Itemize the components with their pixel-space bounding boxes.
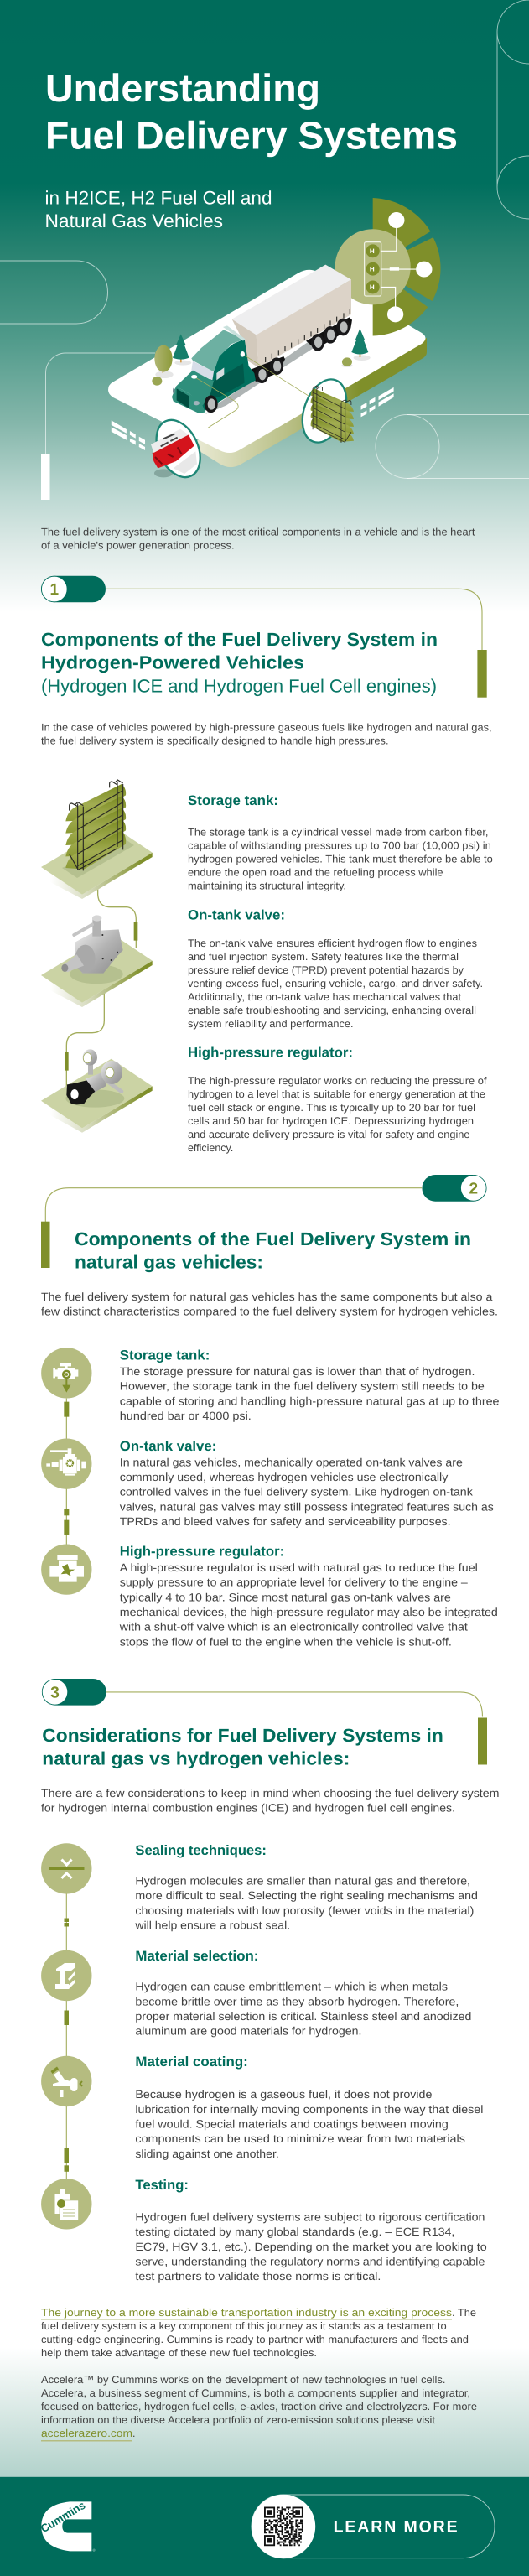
section 3 heading: natural gas vs hydrogen vehicles:: [42, 1748, 350, 1769]
intro text: [41, 526, 475, 551]
material selection text: aluminum are good materials for hydrogen.: [135, 2025, 361, 2038]
natural gas storage tank text: capable of storing and handling high-pressure natural gas at up to three: [120, 1394, 500, 1407]
testing text: EC79, HGV 3.1, etc.). Depending on the market you are looking to: [135, 2241, 487, 2253]
material selection text: become brittle over time as they absorb hydrogen. Therefore,: [135, 1995, 459, 2007]
natural gas regulator text: supply pressure to an appropriate level for delivery to the engine –: [120, 1576, 468, 1589]
icon: sealing: [41, 1843, 92, 1894]
storage tank text: Storage tank:: [188, 793, 278, 808]
natural gas regulator text: with a shut-off valve which is an electronically controlled valve that: [119, 1621, 468, 1633]
natural gas on-tank valve text: commonly used, whereas hydrogen vehicles use electronically: [120, 1471, 449, 1483]
testing text: Testing:: [135, 2178, 189, 2193]
natural gas storage tank text: [120, 1348, 500, 1422]
subtitle: in H2ICE, H2 Fuel Cell and: [45, 187, 272, 208]
natural gas on-tank valve text: controlled valves in the fuel delivery system. Like hydrogen on-tank: [120, 1486, 473, 1498]
material coating text: [135, 2054, 483, 2160]
testing text: test partners to validate those norms is critical.: [135, 2270, 381, 2283]
natural gas storage tank text: Storage tank:: [120, 1348, 210, 1363]
section 2 heading: Components of the Fuel Delivery System in: [75, 1228, 471, 1249]
natural gas regulator text: A high-pressure regulator is used with natural gas to reduce the fuel: [120, 1561, 478, 1574]
subtitle: [45, 187, 272, 231]
title: Fuel Delivery Systems: [45, 113, 458, 157]
illustration: on-tank valve on plate: [41, 915, 153, 1007]
on-tank valve text: venting excess fuel, ensuring vehicle, cargo, and driver safety.: [188, 978, 483, 989]
on-tank valve text: pressure relief device (TPRD) prevent potential hazards by: [188, 964, 464, 976]
icon: coating spray gun: [41, 2056, 92, 2106]
platform: isometric base: [108, 270, 427, 467]
material selection text: proper material selection is critical. Stainless steel and anodized: [135, 2010, 471, 2023]
testing text: Hydrogen fuel delivery systems are subject to rigorous certification: [135, 2210, 485, 2224]
high-pressure regulator text: The high-pressure regulator works on reducing the pressure of: [188, 1075, 487, 1087]
engine callout: [148, 413, 209, 484]
high-pressure regulator text: hydrogen to a level that is suitable for energy generation at the: [188, 1088, 485, 1100]
natural gas storage tank text: The storage pressure for natural gas is lower than that of hydrogen.: [120, 1365, 475, 1378]
on-tank valve text: On-tank valve:: [188, 908, 285, 923]
learn more button: LEARN MORE: [334, 2517, 458, 2536]
sealing techniques text: Sealing techniques:: [135, 1843, 267, 1858]
material coating text: fuel would. Special materials and coatings between moving: [135, 2118, 449, 2131]
material coating text: lubrication for internally moving components in the way that diesel: [135, 2103, 483, 2116]
Cummins logo: [39, 2499, 96, 2553]
tank callout: [294, 373, 355, 449]
data gauge with H2 nodes: [335, 198, 441, 336]
Accelera paragraph: .: [132, 2428, 135, 2439]
natural gas regulator text: stops the flow of fuel to the engine when the vehicle is shut-off.: [120, 1635, 452, 1648]
on-tank valve text: Additionally, the on-tank valve has mechanical valves that: [188, 991, 462, 1003]
section 1 heading: Hydrogen-Powered Vehicles: [41, 652, 304, 673]
section 3 icon column: [41, 1843, 92, 2229]
section 1 heading: (Hydrogen ICE and Hydrogen Fuel Cell engines): [41, 676, 437, 697]
section 2 heading: natural gas vehicles:: [75, 1252, 263, 1273]
high-pressure regulator text: and accurate delivery pressure is vital for safety and engine: [188, 1129, 470, 1140]
section 2 heading: [75, 1228, 471, 1273]
Accelera paragraph: accelerazero.com: [41, 2428, 132, 2439]
Cummins logo: ®: [93, 2548, 96, 2553]
tractor cab: [172, 325, 256, 413]
on-tank valve text: enable safe troubleshooting and servicing, enhancing overall: [188, 1005, 476, 1016]
Accelera paragraph: Accelera, a business segment of Cummins, is both a components supplier and integrator,: [41, 2387, 470, 2399]
natural gas on-tank valve text: On-tank valve:: [120, 1439, 216, 1454]
material coating text: Because hydrogen is a gaseous fuel, it does not provide: [135, 2088, 432, 2101]
hero decorative outlines: [0, 0, 529, 478]
storage tank text: capable of withstanding pressures up to 700 bar (10,000 psi) in: [188, 840, 491, 852]
section 3 badge and connector: [42, 1679, 487, 1764]
section 1 intro: In the case of vehicles powered by high-pressure gaseous fuels like hydrogen and natural gas,: [41, 722, 492, 734]
wheels and chassis: [205, 317, 352, 413]
section 1 heading: Components of the Fuel Delivery System in: [41, 629, 438, 650]
storage tank text: [188, 793, 493, 892]
Accelera paragraph: Accelera™ by Cummins works on the development of new technologies in fuel cells.: [41, 2374, 446, 2386]
closing paragraph: [41, 2307, 476, 2359]
trailer: [232, 265, 351, 367]
subtitle: Natural Gas Vehicles: [45, 210, 223, 231]
natural gas regulator text: [119, 1545, 498, 1648]
intro text: The fuel delivery system is one of the most critical components in a vehicle and is the heart: [41, 526, 475, 538]
Accelera paragraph: information on the diverse Accelera portfolio of zero-emission solutions please visit: [41, 2414, 436, 2426]
high-pressure regulator text: cells and 50 bar for hydrogen ICE. Depressurizing hydrogen: [188, 1115, 474, 1127]
white rectangle on hero left: [41, 454, 50, 500]
storage tank text: maintaining its structural integrity.: [188, 880, 346, 892]
section 2 intro: The fuel delivery system for natural gas vehicles has the same components but also a: [41, 1291, 493, 1303]
natural gas storage tank text: However, the storage tank in the fuel delivery system still needs to be: [120, 1380, 485, 1393]
Accelera paragraph: focused on batteries, hydrogen fuel cells, e-axles, traction drive and electrolyzers. For more: [41, 2401, 477, 2412]
sealing techniques text: Hydrogen molecules are smaller than natural gas and therefore,: [135, 1875, 470, 1887]
intro text: of a vehicle's power generation process.: [41, 539, 235, 551]
title: Understanding: [45, 66, 320, 110]
icon: storage tank: [41, 1348, 91, 1398]
sealing techniques text: choosing materials with low porosity (fewer voids in the material): [135, 1904, 474, 1917]
storage tank text: endure the open road and the refueling process while: [188, 867, 443, 879]
section 3 heading: [42, 1725, 443, 1769]
closing paragraph: cutting-edge engineering. Cummins is ready to partner with manufacturers and fleets and: [41, 2334, 469, 2345]
natural gas on-tank valve text: [120, 1439, 494, 1528]
on-tank valve text: system reliability and performance.: [188, 1018, 354, 1030]
icon: testing clipboard: [41, 2179, 92, 2229]
illustration: storage tank on plate: [41, 780, 153, 899]
material selection text: Hydrogen can cause embrittlement – which is when metals: [135, 1981, 448, 1993]
section 3 intro: [41, 1787, 500, 1815]
learn more button: [252, 2495, 495, 2558]
section 3 intro: There are a few considerations to keep in mind when choosing the fuel delivery system: [41, 1787, 500, 1800]
section 3 intro: for hydrogen internal combustion engines (ICE) and hydrogen fuel cell engines.: [41, 1802, 455, 1815]
Cummins logo: Cummins: [39, 2499, 87, 2535]
natural gas regulator text: High-pressure regulator:: [120, 1545, 284, 1560]
section 3 badge and connector: 3: [50, 1684, 60, 1702]
closing paragraph: help them take advantage of these new fuel technologies.: [41, 2347, 317, 2359]
testing text: [135, 2178, 487, 2283]
Accelera paragraph: [41, 2374, 477, 2442]
hero white dash marks: [112, 387, 394, 450]
truck and scenery: [152, 265, 371, 428]
section 2 intro: few distinct characteristics compared to the fuel delivery system for hydrogen vehicles.: [41, 1306, 498, 1318]
data gauge with H2 nodes: H: [370, 266, 375, 273]
on-tank valve text: [188, 908, 483, 1030]
sealing techniques text: will help ensure a robust seal.: [134, 1919, 290, 1932]
section 1 badge and connector: 1: [50, 581, 60, 599]
icon: material I-beam: [41, 1950, 92, 2001]
on-tank valve text: The on-tank valve ensures efficient hydrogen flow to engines: [188, 937, 477, 949]
footer band: [0, 2477, 529, 2576]
storage tank text: hydrogen powered vehicles. This tank must therefore be able to: [188, 854, 493, 865]
testing text: serve, understanding the regulatory norms and identifying capable: [135, 2256, 485, 2267]
section 2 badge and connector: 2: [469, 1181, 478, 1197]
section 1 heading: [41, 629, 438, 697]
high-pressure regulator text: High-pressure regulator:: [188, 1046, 353, 1061]
illustration: high-pressure regulator on plate: [41, 1049, 153, 1133]
data gauge with H2 nodes: H: [370, 283, 375, 291]
material selection text: [135, 1949, 471, 2038]
closing paragraph: The journey to a more sustainable transportation industry is an exciting process: [41, 2307, 452, 2319]
natural gas on-tank valve text: TPRDs and bleed valves for safety and serviceability purposes.: [120, 1515, 451, 1528]
sealing techniques text: [134, 1843, 478, 1932]
storage tank text: The storage tank is a cylindrical vessel made from carbon fiber,: [188, 827, 488, 839]
section 2 badge and connector: [41, 1175, 486, 1268]
high-pressure regulator text: fuel cell stack or engine. This is typically up to 20 bar for fuel: [188, 1102, 475, 1114]
material coating text: sliding against one another.: [135, 2148, 279, 2160]
section 2 intro: [41, 1291, 498, 1318]
material coating text: Material coating:: [135, 2054, 248, 2070]
high-pressure regulator text: efficiency.: [188, 1142, 233, 1154]
icon: regulator: [41, 1544, 91, 1595]
natural gas storage tank text: hundred bar or 4000 psi.: [120, 1410, 252, 1422]
testing text: testing dictated by many global standards (e.g. – ECE R134,: [135, 2225, 454, 2238]
section 1 intro: [41, 722, 492, 747]
natural gas on-tank valve text: valves, natural gas valves may still possess integrated features such as: [120, 1500, 494, 1513]
QR code: [264, 2507, 303, 2546]
section 1 intro: the fuel delivery system is specifically designed to handle high pressures.: [41, 735, 389, 747]
section 1 badge and connector: [41, 576, 487, 698]
high-pressure regulator text: [188, 1046, 487, 1154]
closing paragraph: . The: [452, 2307, 476, 2319]
material selection text: Material selection:: [135, 1949, 258, 1964]
title: [45, 66, 458, 157]
section 2 icon column: [41, 1348, 91, 1595]
natural gas on-tank valve text: In natural gas vehicles, mechanically operated on-tank valves are: [120, 1456, 463, 1468]
sealing techniques text: more difficult to seal. Selecting the right sealing mechanisms and: [135, 1889, 478, 1902]
natural gas regulator text: typically 4 to 10 bar. Since most natural gas on-tank valves are: [120, 1591, 451, 1603]
trees and bushes: [152, 329, 371, 386]
callout lines: [191, 351, 310, 428]
material coating text: components can be used to minimize wear from two materials: [135, 2132, 465, 2145]
closing paragraph: fuel delivery system is a key component of this journey as it stands as a testament to: [41, 2320, 447, 2332]
natural gas regulator text: mechanical devices, the high-pressure regulator may also be integrated: [120, 1606, 498, 1618]
icon: on-tank valve: [41, 1438, 91, 1489]
road shadow: [205, 320, 352, 414]
on-tank valve text: and fuel injection system. Safety features like the thermal: [188, 951, 459, 963]
data gauge with H2 nodes: H: [370, 247, 375, 255]
section 1 component connectors: [65, 886, 137, 1086]
section 3 heading: Considerations for Fuel Delivery Systems in: [42, 1725, 443, 1746]
